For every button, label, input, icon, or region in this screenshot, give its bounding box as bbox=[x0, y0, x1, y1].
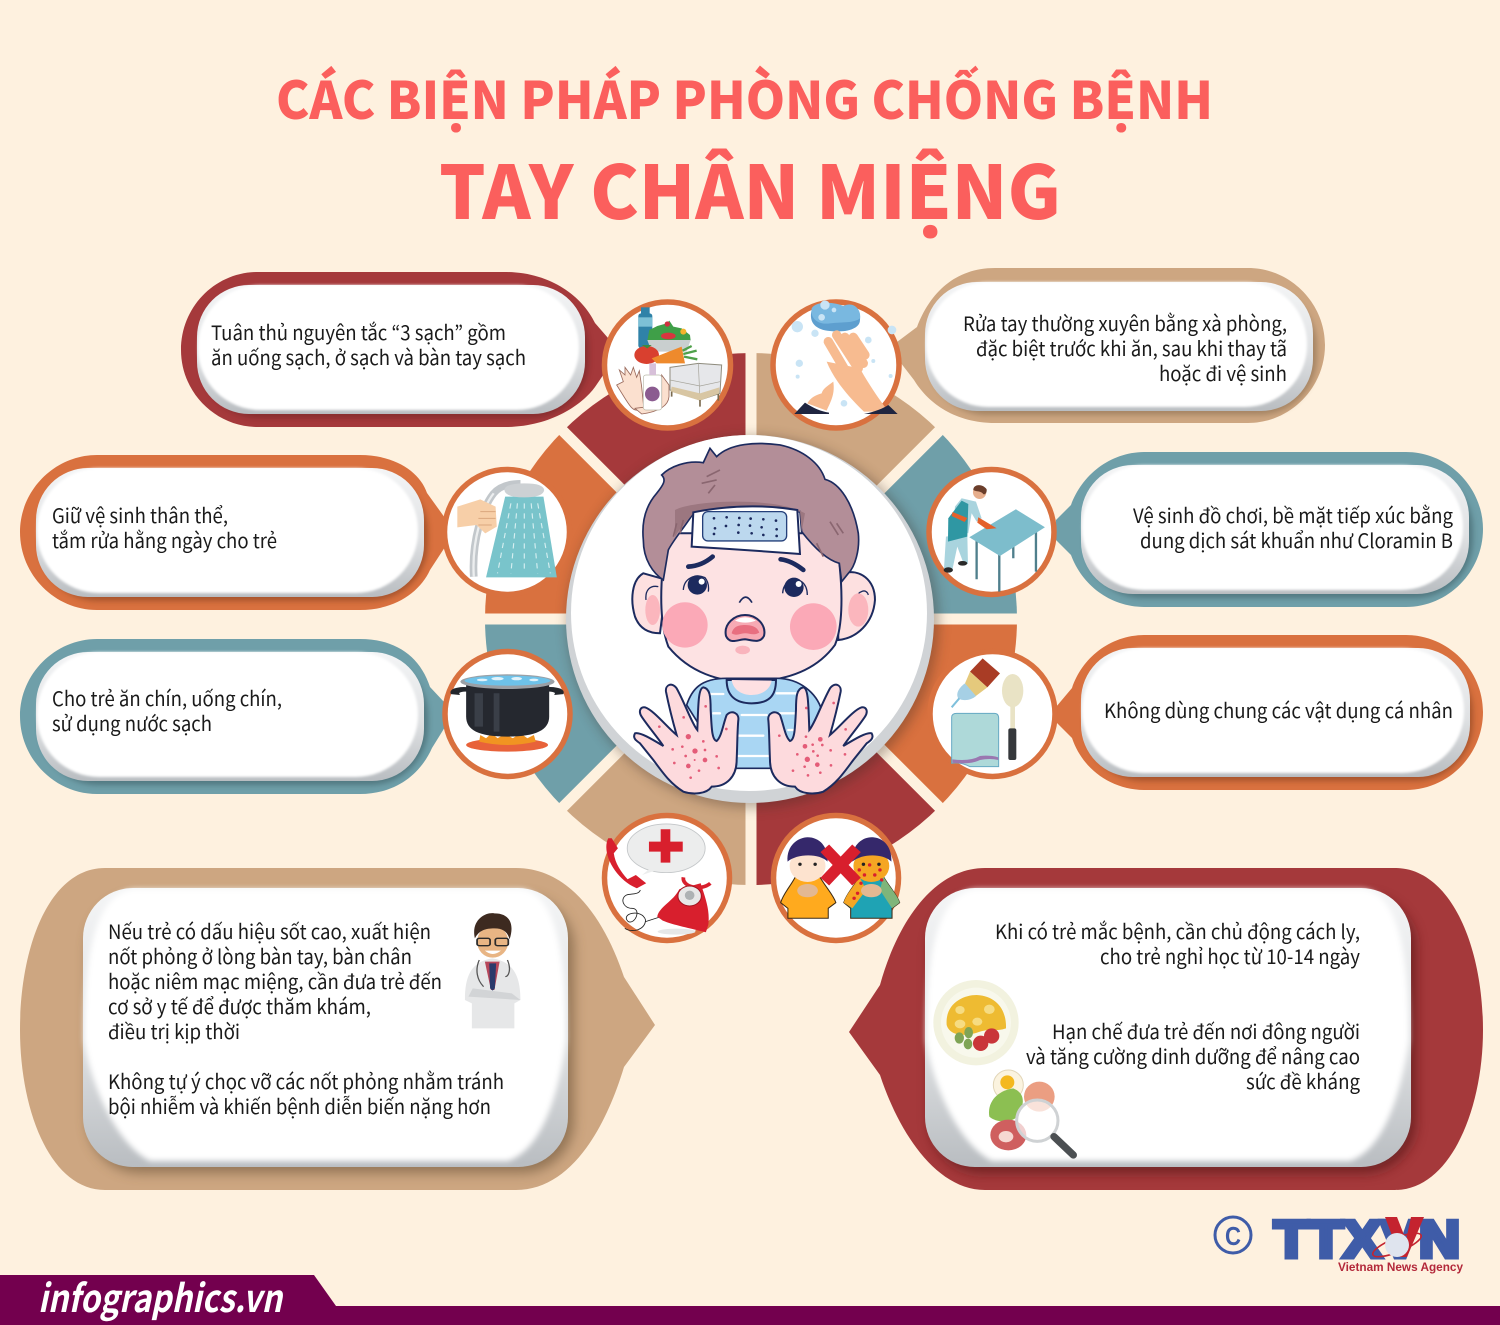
title: TAY CHÂN MIỆNG bbox=[439, 134, 1061, 241]
bubble: body hygiene: Giữ vệ sinh thân thể, bbox=[52, 500, 228, 529]
radial wheel of eight coloured sectors bbox=[470, 340, 1030, 900]
bubble: hand washing: Rửa tay thường xuyên bằng xà phòng, bbox=[963, 308, 1287, 337]
icon: doctor bbox=[465, 913, 520, 1028]
icon circle: boiling pot bbox=[445, 652, 570, 776]
bubble: three clean rule: ăn uống sạch, ở sạch và bàn tay sạch bbox=[211, 342, 526, 371]
icon circle: cleaning a table bbox=[929, 470, 1054, 594]
copyright mark: C bbox=[1225, 1221, 1241, 1251]
logo: TTXVN: TTXVN bbox=[1274, 1211, 1460, 1269]
bubble: cleaning toys and surfaces bbox=[1056, 452, 1483, 607]
illustration: right hand with spots bbox=[768, 685, 873, 793]
bubble: personal items: Không dùng chung các vật dụng cá nhân bbox=[1104, 695, 1453, 724]
bubble: cooked food bbox=[20, 639, 445, 794]
central circle with sick boy bbox=[566, 435, 939, 808]
illustration: striped shirt bbox=[687, 678, 822, 768]
bubble: see a doctor bbox=[20, 868, 655, 1190]
bubble: isolation and nutrition: cho trẻ nghỉ học từ 10-14 ngày bbox=[1100, 941, 1361, 970]
bubble: see a doctor: Không tự ý chọc vỡ các nốt phỏng nhằm tránh bbox=[108, 1066, 504, 1095]
bubble: cleaning toys and surfaces: dung dịch sát khuẩn như Cloramin B bbox=[1140, 525, 1453, 554]
illustration: boy's head bbox=[632, 444, 875, 682]
title bbox=[276, 59, 1213, 241]
footer band: infographics.vn bbox=[38, 1268, 284, 1323]
icon circle: children, avoid contact bbox=[774, 816, 900, 940]
icon circle: telephone and red cross bbox=[604, 816, 730, 940]
bubble: see a doctor: điều trị kịp thời bbox=[108, 1016, 240, 1045]
bubble: isolation and nutrition: sức đề kháng bbox=[1246, 1066, 1360, 1095]
bubble: isolation and nutrition: Hạn chế đưa trẻ đến nơi đông người bbox=[1052, 1016, 1360, 1045]
copyright mark bbox=[1215, 1217, 1251, 1253]
title: CÁC BIỆN PHÁP PHÒNG CHỐNG BỆNH bbox=[276, 59, 1213, 134]
bubble: three clean rule bbox=[181, 272, 608, 427]
bubble: hand washing bbox=[897, 268, 1325, 423]
icon circle: washing hands with soap bbox=[773, 300, 899, 428]
logo: TTXVN bbox=[1215, 1211, 1464, 1274]
bubble: see a doctor: hoặc niêm mạc miệng, cần đưa trẻ đến bbox=[108, 966, 442, 995]
bubble: see a doctor: Nếu trẻ có dấu hiệu sốt cao, xuất hiện bbox=[108, 916, 431, 945]
bubble: three clean rule: Tuân thủ nguyên tắc “3 sạch” gồm bbox=[211, 317, 506, 346]
bubble: body hygiene: tắm rửa hằng ngày cho trẻ bbox=[52, 525, 277, 554]
bubble: cooked food: sử dụng nước sạch bbox=[52, 708, 212, 737]
bubble: body hygiene bbox=[20, 455, 445, 610]
bubble: hand washing: hoặc đi vệ sinh bbox=[1159, 358, 1287, 387]
bubble: hand washing: đặc biệt trước khi ăn, sau khi thay tã bbox=[976, 333, 1287, 362]
bubble: cooked food: Cho trẻ ăn chín, uống chín, bbox=[52, 683, 282, 712]
footer band bbox=[0, 1268, 1500, 1325]
icon circle: personal items bbox=[930, 652, 1055, 776]
bubble: see a doctor: nốt phỏng ở lòng bàn tay, bàn chân bbox=[108, 941, 412, 970]
icon circle: shower head bbox=[444, 470, 570, 594]
icon circle: food, hygiene and bed bbox=[604, 302, 730, 428]
bubble: isolation and nutrition: và tăng cường dinh dưỡng để nâng cao bbox=[1026, 1041, 1360, 1070]
bubble: isolation and nutrition bbox=[849, 868, 1483, 1190]
bubble: see a doctor: bội nhiễm và khiến bệnh diễn biến nặng hơn bbox=[108, 1091, 491, 1120]
bubble: isolation and nutrition: Khi có trẻ mắc bệnh, cần chủ động cách ly, bbox=[995, 916, 1360, 945]
bubble: see a doctor: cơ sở y tế để được thăm khám, bbox=[108, 991, 371, 1020]
bubble: cleaning toys and surfaces: Vệ sinh đồ chơi, bề mặt tiếp xúc bằng bbox=[1133, 500, 1453, 529]
icon: food plate and magnifier bbox=[933, 980, 1073, 1155]
bubble: personal items bbox=[1056, 635, 1483, 790]
illustration: left hand with spots bbox=[634, 685, 738, 793]
logo: TTXVN: Vietnam News Agency bbox=[1338, 1262, 1464, 1274]
